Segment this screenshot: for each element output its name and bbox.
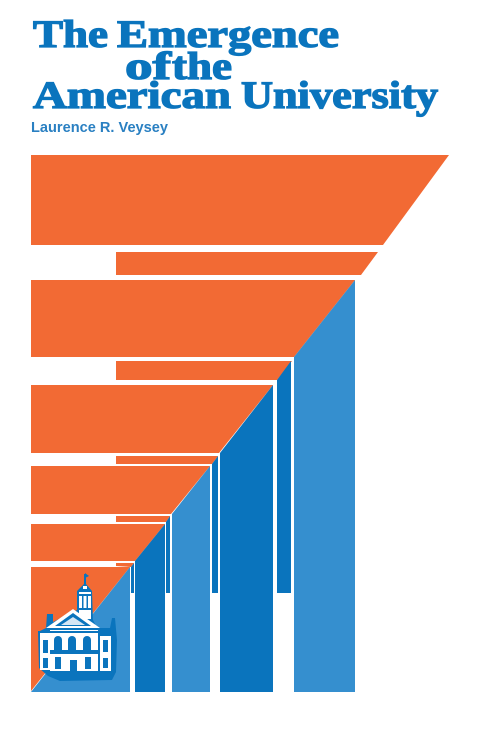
- title: Emergence: [117, 13, 339, 56]
- title: of: [125, 45, 172, 88]
- title: University: [241, 74, 439, 117]
- pediment: [46, 609, 100, 628]
- title: [33, 13, 439, 117]
- title: The: [33, 13, 108, 56]
- cupola: [79, 586, 91, 619]
- vane: [85, 573, 89, 578]
- orange stepped bands: [31, 155, 449, 691]
- main walls: [40, 633, 50, 670]
- icon: university hall building: [38, 573, 117, 681]
- title: American: [33, 74, 231, 117]
- title: the: [172, 45, 232, 88]
- windows: [43, 636, 108, 676]
- building silhouette: [38, 574, 117, 681]
- author: Laurence R. Veysey: [31, 119, 169, 136]
- blue columns: [31, 280, 355, 692]
